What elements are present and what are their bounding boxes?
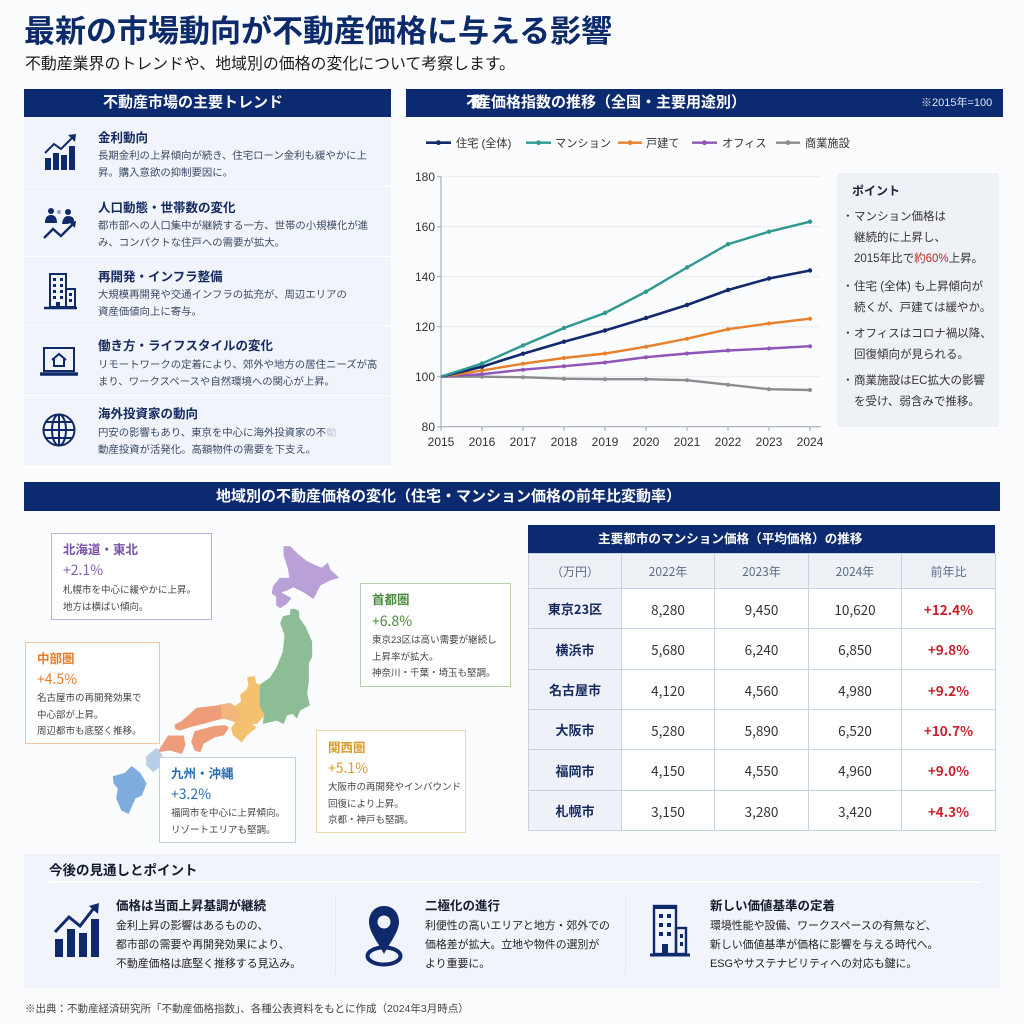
item title: 価格は当面上昇基調が継続 (116, 899, 266, 913)
icon: buildings (44, 273, 77, 310)
outlook item: continued rise (54, 899, 301, 970)
point: office: 回復傾向が見られる。 (854, 348, 969, 360)
panel: chart points: ･ (845, 280, 851, 292)
callout rate: +2.1% (63, 560, 103, 580)
callout text: 中心部が上昇。 (37, 710, 104, 721)
item text: 動産投資が活発化。高額物件の需要を下支え。 (98, 445, 316, 456)
panel: chart points (837, 173, 999, 427)
item text: 環境性能や設備、ワークスペースの有無など、 (710, 920, 937, 932)
table: city condominium prices (528, 553, 996, 831)
region: Kyushu (113, 767, 146, 813)
callout rate: +5.1% (328, 758, 368, 778)
table: city condominium prices: 2023年 (742, 562, 781, 580)
item text: 都市部への人口集中が継続する一方、世帯の小規模化が進 (98, 221, 368, 232)
point: office: オフィスはコロナ禍以降、 (854, 328, 992, 340)
callout text: リゾートエリアも堅調。 (171, 825, 276, 836)
heading: price index (406, 89, 1003, 117)
callout: Chubu (25, 642, 160, 744)
callout text: 大阪市の再開発やインバウンド (328, 782, 461, 793)
x axis labels: 2018 (551, 435, 578, 449)
table: city condominium prices: 前年比 (930, 562, 966, 580)
panel: outlook (24, 854, 1000, 988)
trend item: population (24, 187, 391, 257)
x axis labels: 2019 (592, 435, 619, 449)
trend item: work style (24, 326, 391, 396)
map of Japan (112, 546, 339, 814)
title: 最新の市場動向が不動産価格に与える影響 (24, 14, 612, 49)
callout title: 北海道・東北 (63, 543, 138, 557)
table: city condominium prices: 6,850 (838, 639, 872, 659)
item text: まり、ワークスペースや自然環境への関心が上昇。 (98, 377, 335, 388)
point: condominiums: 継続的に上昇し、 (854, 232, 946, 244)
chart legend: 住宅 (全体) (456, 136, 512, 150)
table: city condominium prices: 名古屋市 (549, 680, 601, 699)
point: condominiums: 2015年比で約60%上昇。 (854, 252, 983, 264)
icon: globe (42, 414, 76, 446)
callout rate: +3.2% (171, 784, 211, 804)
x axis labels (428, 435, 824, 449)
table: city condominium prices: 3,150 (651, 800, 685, 820)
callout text: 東京23区は高い需要が継続し (372, 635, 497, 646)
series: housing overall (441, 268, 812, 377)
x axis labels: 2017 (510, 435, 537, 449)
item text: より重要に。 (425, 958, 490, 970)
region: Hokkaido (272, 547, 338, 608)
x axis labels: 2024 (797, 435, 824, 449)
callout text: 上昇率が拡大。 (372, 652, 439, 663)
callout title: 九州・沖縄 (171, 767, 234, 781)
table: city condominium prices: 2022年 (649, 562, 687, 580)
heading: market trends: 不動産市場の主要トレンド (103, 94, 283, 111)
chart legend: 戸建て (646, 137, 680, 150)
series: commercial (441, 375, 812, 392)
table: city condominium prices: 4,120 (651, 680, 685, 700)
trend item: redevelopment (24, 257, 391, 326)
table: city condominium prices: 10,620 (834, 598, 876, 618)
source note: ※出典：不動産経済研究所「不動産価格指数」、各種公表資料をもとに作成（2024年3月時点） (25, 1003, 469, 1015)
heading: regional changes (24, 482, 1000, 511)
table heading (528, 525, 995, 553)
series: condominiums (441, 220, 812, 377)
callout: Kyushu and Okinawa (159, 757, 296, 843)
callout text: 周辺都市も底堅く推移。 (37, 726, 142, 737)
icon: map pin (366, 906, 402, 966)
region: Kansai west (220, 703, 240, 722)
item text (116, 920, 301, 970)
index base note: ※2015年=100 (921, 97, 992, 109)
table: city condominium prices: 8,280 (651, 598, 685, 618)
item title: 働き方・ライフスタイルの変化 (98, 339, 273, 353)
icon: bars and arrow (54, 903, 99, 957)
table: city condominium prices: 4,980 (838, 680, 872, 700)
item text: 新しい価値基準が価格に影響を与える時代へ。 (710, 939, 938, 951)
table: city condominium prices: +4.3% (928, 800, 969, 820)
heading: market trends (24, 89, 391, 117)
series: detached houses (441, 317, 812, 377)
callout rate: +4.5% (37, 669, 77, 689)
series: office (441, 344, 812, 377)
item text: 価格差が拡大。立地や物件の選別が (425, 939, 599, 951)
x axis labels: 2023 (756, 435, 783, 449)
item title: 金利動向 (98, 131, 148, 145)
point: commercial: を受け、弱含みで推移。 (854, 396, 980, 408)
table: city condominium prices: +9.2% (928, 680, 969, 700)
item text: 長期金利の上昇傾向が続き、住宅ローン金利も緩やかに上 (98, 151, 367, 162)
x axis labels: 2020 (633, 435, 660, 449)
callout text: 京都・神戸も堅調。 (328, 815, 414, 826)
x axis labels: 2016 (469, 435, 496, 449)
callout text: 回復により上昇。 (328, 799, 404, 810)
item title: 人口動態・世帯数の変化 (98, 201, 236, 215)
region: Chubu (232, 677, 264, 742)
outlook item: polarization (366, 899, 610, 970)
item text: 金利上昇の影響はあるものの、 (116, 920, 268, 932)
chart legend: オフィス (722, 137, 767, 150)
item text: 資産価値向上に寄与。 (98, 307, 202, 318)
callout text: 神奈川・千葉・埼玉も堅調。 (372, 668, 496, 679)
chart legend: 商業施設 (805, 137, 850, 150)
callout rate: +6.8% (372, 611, 412, 631)
point: housing (845, 280, 991, 314)
item text (98, 220, 368, 249)
item text (710, 920, 938, 970)
chart legend (426, 136, 850, 150)
callout text (171, 808, 285, 836)
y axis labels: 100 (415, 370, 435, 384)
callout title: 首都圏 (372, 593, 410, 607)
table: city condominium prices: 5,680 (651, 639, 685, 659)
item text: 不動産価格は底堅く推移する見込み。 (116, 958, 301, 970)
region: strait (147, 748, 162, 772)
table: city condominium prices: 福岡市 (555, 760, 594, 780)
point: housing: 住宅 (全体) も上昇傾向が (854, 280, 983, 292)
callout: Kansai (316, 730, 466, 833)
heading: regional changes: 地域別の不動産価格の変化（住宅・マンション価格の前年比変動率） (216, 488, 681, 505)
table: city condominium prices: （万円） (551, 562, 599, 580)
callout text (63, 584, 196, 613)
table: city condominium prices: 東京23区 (548, 599, 602, 618)
item text (425, 920, 610, 970)
region: Shikoku (192, 726, 228, 752)
heading text: 不動産 価格指数の推移（全国・主要用途別） (466, 94, 746, 111)
item text (98, 289, 347, 318)
y axis labels: 140 (415, 270, 435, 284)
icon: people and trend (43, 208, 76, 239)
table: city condominium prices: 6,520 (838, 720, 872, 740)
callout text (37, 692, 142, 737)
item text (98, 150, 367, 179)
icon: laptop with house (40, 347, 78, 376)
callout text (328, 782, 461, 826)
outlook item: new value standards (650, 899, 938, 970)
y axis labels (415, 170, 435, 434)
table: city condominium prices: 4,960 (838, 760, 872, 780)
icon: office building (650, 904, 690, 956)
callout text: 地方は横ばい傾向。 (63, 602, 149, 613)
panel: chart points: ･ (845, 328, 851, 340)
item text (98, 427, 337, 456)
chart legend: マンション (555, 138, 611, 150)
item text: 大規模再開発や交通インフラの拡充が、周辺エリアの (98, 290, 347, 301)
point: office (845, 327, 992, 360)
item title: 海外投資家の動向 (98, 407, 198, 421)
item title: 再開発・インフラ整備 (98, 270, 223, 284)
table: city condominium prices: +9.8% (928, 639, 969, 659)
panel: chart points: ･ (845, 210, 851, 222)
region: Tohoku and Kanto (259, 609, 312, 723)
trend item: interest rates (24, 116, 391, 187)
line chart: price index (415, 136, 850, 449)
table: city condominium prices: 6,240 (745, 639, 778, 659)
item text: リモートワークの定着により、郊外や地方の居住ニーズが高 (98, 360, 377, 371)
points heading: ポイント (852, 184, 900, 198)
callout title: 中部圏 (37, 652, 75, 666)
item text: 利便性の高いエリアと地方・郊外での (425, 920, 610, 932)
table: city condominium prices: 2024年 (836, 562, 874, 580)
item title: 二極化の進行 (425, 899, 500, 913)
item text: ESGやサステナビリティへの対応も鍵に。 (710, 958, 917, 970)
point: commercial (845, 374, 985, 408)
y axis labels: 160 (415, 220, 435, 234)
y axis labels: 120 (415, 320, 435, 334)
table: city condominium prices: 5,890 (745, 720, 778, 740)
table heading: 主要都市のマンション価格（平均価格）の推移 (598, 532, 862, 546)
table: city condominium prices: +12.4% (924, 598, 973, 618)
outlook heading: 今後の見通しとポイント (49, 863, 198, 878)
item text: 都市部の需要や再開発効果により、 (116, 939, 290, 951)
table: city condominium prices: 3,280 (745, 800, 778, 820)
table: city condominium prices: 4,560 (745, 680, 778, 700)
x axis labels: 2015 (428, 435, 455, 449)
table: city condominium prices: +9.0% (928, 760, 969, 780)
item text: 円安の影響もあり、東京を中心に海外投資家の不動 (98, 428, 337, 439)
point: commercial: 商業施設はEC拡大の影響 (854, 374, 985, 386)
table: city condominium prices: 4,150 (651, 760, 685, 780)
item text (98, 359, 377, 388)
table: city condominium prices: 横浜市 (555, 640, 594, 658)
item text: 昇。購入意欲の抑制要因に。 (98, 168, 233, 179)
region: western islet (158, 736, 185, 753)
panel: market trends (24, 89, 391, 465)
subtitle: 不動産業界のトレンドや、地域別の価格の変化について考察します。 (25, 56, 515, 73)
point: condominiums (845, 210, 983, 264)
table: city condominium prices: 大阪市 (555, 720, 594, 739)
point: housing: 続くが、戸建ては緩やか。 (854, 302, 991, 314)
y axis labels: 180 (415, 170, 435, 184)
table: city condominium prices: 3,420 (838, 800, 872, 820)
table: city condominium prices: +10.7% (924, 720, 973, 740)
point: condominiums: マンション価格は (854, 210, 946, 222)
table: city condominium prices: 5,280 (651, 720, 685, 740)
trend item: overseas investors (42, 407, 337, 456)
callout text: 札幌市を中心に緩やかに上昇。 (63, 585, 196, 596)
callout: Hokkaido and Tohoku (51, 533, 212, 620)
x axis labels: 2021 (674, 435, 701, 449)
panel: chart points: ･ (845, 374, 851, 386)
callout text (372, 634, 497, 679)
callout title: 関西圏 (328, 741, 366, 755)
icon: rising bar chart (44, 134, 76, 170)
x axis labels: 2022 (715, 435, 742, 449)
y axis labels: 80 (422, 420, 435, 434)
item text: み、コンパクトな住戸への需要が拡大。 (98, 238, 285, 249)
table: city condominium prices: 9,450 (745, 598, 778, 618)
region: Chugoku (175, 706, 222, 730)
item title: 新しい価値基準の定着 (710, 899, 835, 913)
table: city condominium prices: 4,550 (745, 760, 778, 780)
callout text: 名古屋市の再開発効果で (37, 693, 142, 704)
callout text: 福岡市を中心に上昇傾向。 (171, 808, 285, 819)
table: city condominium prices: 札幌市 (555, 801, 594, 820)
callout: Tokyo area (360, 583, 511, 687)
